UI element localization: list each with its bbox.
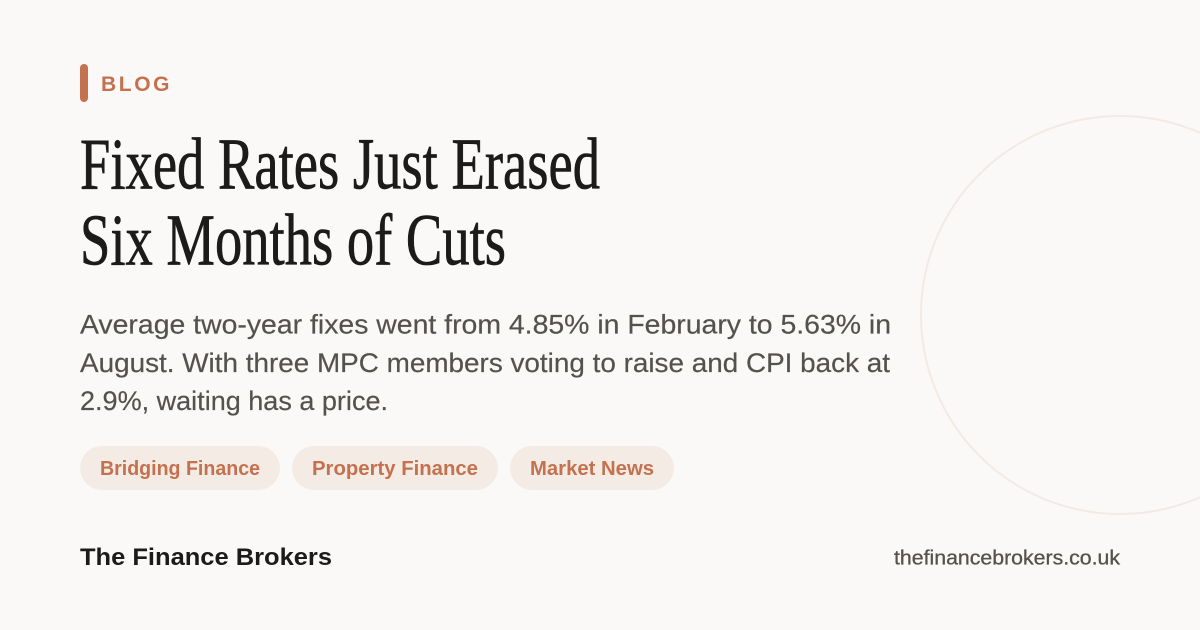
tag: Property Finance: Property Finance (312, 458, 478, 480)
brand name: The Finance Brokers (80, 544, 332, 571)
title (80, 124, 600, 280)
summary text: Average two-year fixes went from 4.85% in February to 5.63% in (80, 310, 891, 340)
tag: Market News: Market News (530, 458, 654, 480)
tag: Property Finance (292, 446, 498, 490)
tag: Bridging Finance: Bridging Finance (100, 458, 260, 480)
website url: thefinancebrokers.co.uk (894, 548, 1121, 570)
summary text: 2.9%, waiting has a price. (80, 386, 388, 416)
title: Fixed Rates Just Erased (80, 124, 600, 204)
summary text: August. With three MPC members voting to raise and CPI back at (80, 348, 891, 378)
eyebrow: blog label: BLOG (101, 73, 172, 96)
decorative circle outline (921, 116, 1200, 514)
summary text (80, 310, 891, 416)
eyebrow: blog label (80, 64, 172, 102)
tag: Market News (510, 446, 674, 490)
tag: Bridging Finance (80, 446, 280, 490)
title: Six Months of Cuts (80, 200, 506, 280)
